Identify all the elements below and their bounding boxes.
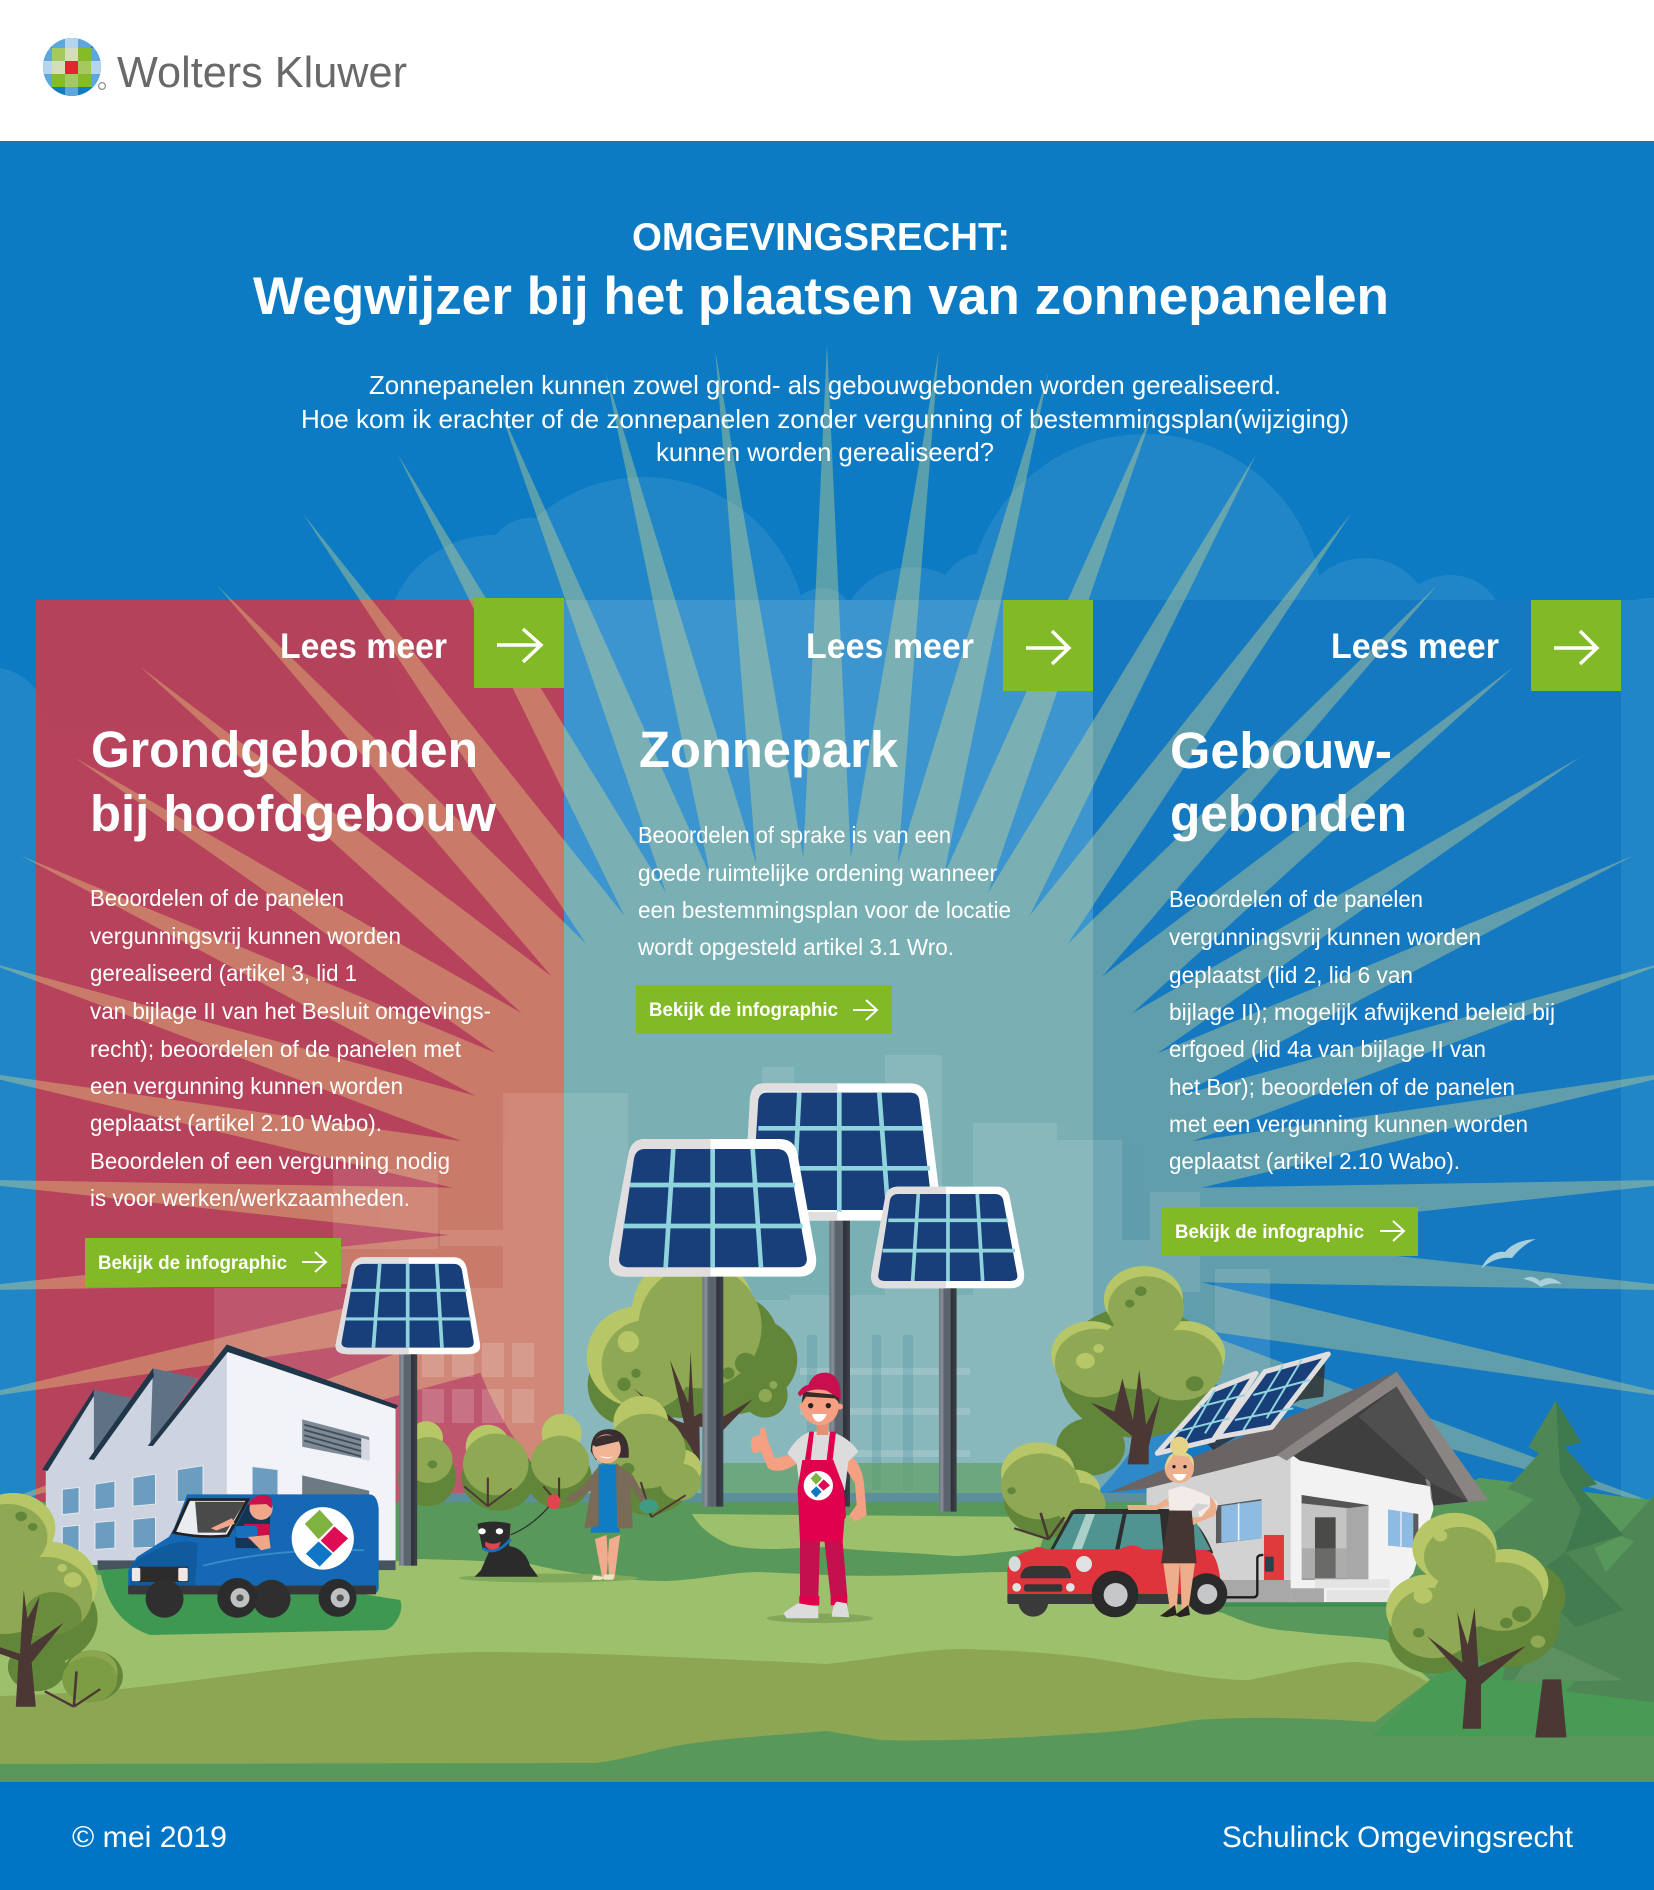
logo: Wolters Kluwer: Wolters Kluwer [117,48,407,97]
ground base [0,1478,1654,1782]
intro text: Zonnepanelen kunnen zowel grond- als gebouwgebonden worden gerealiseerd. [369,370,1281,400]
house [1108,1372,1488,1607]
upper lawn [692,1514,1050,1556]
button: right [1162,1207,1418,1256]
solar panel: small right [871,1187,1024,1512]
footer date: © mei 2019 [72,1821,227,1854]
tree: far left [0,1493,123,1707]
body text: gebouwgebonden: geplaatst (artikel 2.10 Wabo). [1169,1148,1460,1174]
van [128,1494,379,1618]
body text: gebouwgebonden: met een vergunning kunnen worden [1169,1111,1528,1137]
read-more link: right: Lees meer [1331,627,1499,666]
heading: grondgebonden [90,721,496,842]
man in overalls [751,1373,873,1623]
body text: gebouwgebonden: het Bor); beoordelen of de panelen [1169,1074,1515,1100]
body text: grondgebonden [90,885,491,1211]
van shadow [100,1565,401,1635]
read-more link: middle: Lees meer [806,627,974,666]
body text: gebouwgebonden: vergunningsvrij kunnen worden [1169,924,1481,950]
heading: grondgebonden: Grondgebonden [91,721,478,778]
intro text [301,370,1349,467]
city skyline [214,1055,1270,1513]
panel: gebouwgebonden (blue) [1093,600,1621,1560]
body text: zonnepark: Beoordelen of sprake is van een [638,822,951,848]
body text: grondgebonden: Beoordelen of de panelen [90,885,344,911]
woman walking dog [564,1429,658,1580]
body text: gebouwgebonden: bijlage II); mogelijk afwijkend beleid bij [1169,999,1555,1025]
right green mound [1373,1600,1654,1736]
pug dog [459,1494,638,1582]
body text: gebouwgebonden: Beoordelen of de panelen [1169,886,1423,912]
red car with woman [1007,1437,1227,1617]
heading: gebouwgebonden: gebonden [1170,785,1407,842]
read-more link: right [1331,600,1621,691]
body text: grondgebonden: Beoordelen of een vergunning nodig [90,1148,450,1174]
heading: gebouwgebonden [1170,722,1407,842]
sun rays [0,344,1654,1608]
skyline windows [422,1335,970,1490]
button: middle: Bekijk de infographic [649,1000,838,1021]
horizon band [417,1493,1547,1503]
body text: grondgebonden: van bijlage II van het Besluit omgevings- [90,998,491,1024]
logo: Wolters Kluwer [43,38,406,96]
body text: gebouwgebonden: geplaatst (lid 2, lid 6 van [1169,962,1413,988]
main lawn [0,1559,1430,1720]
read-more link: middle [806,600,1093,691]
body text: zonnepark [637,822,1011,960]
body text: grondgebonden: recht); beoordelen of de panelen met [90,1036,462,1062]
header band [0,0,1654,141]
title block: Wegwijzer bij het plaatsen van zonnepanelen [253,267,1389,326]
solar panel: large front [609,1139,816,1507]
panel: grondgebonden (red) [36,600,564,1560]
tree: behind solar panels [587,1252,797,1467]
body text: grondgebonden: vergunningsvrij kunnen worden [90,923,401,949]
title block [253,216,1389,326]
footer source: Schulinck Omgevingsrecht [1222,1821,1574,1854]
rooftop solar array [1157,1354,1328,1453]
title block: OMGEVINGSRECHT: [632,216,1010,259]
distant green strip [700,1463,1030,1495]
heading: zonnepark: Zonnepark [639,721,899,778]
heading: grondgebonden: bij hoofdgebouw [90,785,496,842]
bird [1481,1239,1562,1287]
body text: grondgebonden: een vergunning kunnen worden [90,1073,403,1099]
footer band [0,1782,1654,1890]
body text: zonnepark: goede ruimtelijke ordening wanneer [638,860,997,886]
factory building [42,1345,398,1570]
solar panel: large back [744,1083,941,1507]
heading: gebouwgebonden: Gebouw- [1170,722,1392,779]
bushes behind woman [398,1396,701,1517]
olive band [0,1649,1428,1764]
button: middle [636,985,892,1034]
pine trees [1481,1400,1654,1738]
read-more link: left: Lees meer [280,627,447,666]
body text: gebouwgebonden [1169,886,1555,1174]
body text: gebouwgebonden: erfgoed (lid 4a van bijlage II van [1169,1036,1486,1062]
button: left: Bekijk de infographic [98,1253,287,1274]
body text: grondgebonden: geplaatst (artikel 2.10 Wabo). [90,1110,382,1136]
button: left [85,1238,341,1287]
intro text: Hoe kom ik erachter of de zonnepanelen zonder vergunning of bestemmingsplan(wijziging) [301,404,1349,434]
solar panel: left by factory [336,1257,480,1566]
panel: zonnepark (light) [564,600,1093,1560]
body text: zonnepark: een bestemmingsplan voor de locatie [638,897,1011,923]
tree: front right [1386,1513,1565,1729]
body text: zonnepark: wordt opgesteld artikel 3.1 Wro. [637,934,954,960]
read-more link: left [280,598,564,688]
tree: behind house [1001,1266,1225,1539]
body text: grondgebonden: gerealiseerd (artikel 3, lid 1 [90,960,357,986]
body text: grondgebonden: is voor werken/werkzaamheden. [90,1185,410,1211]
clouds [0,434,1654,1782]
button: right: Bekijk de infographic [1175,1222,1364,1243]
intro text: kunnen worden gerealiseerd? [656,437,994,467]
